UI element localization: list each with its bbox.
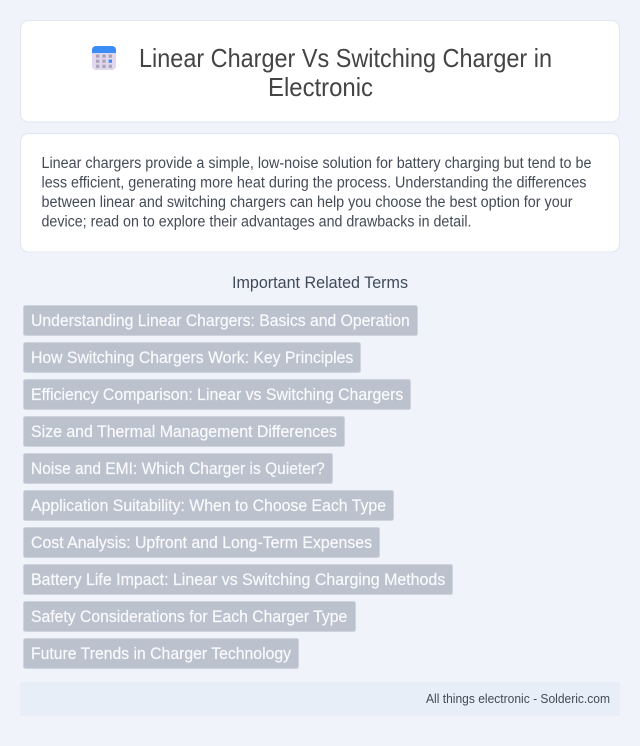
tag: application suitability (24, 490, 394, 520)
tag: application suitability: Application Suitability: When to Choose Each Type (31, 497, 386, 515)
panel: intro paragraph: between linear and switching chargers can help you choose the best option for your (42, 194, 572, 211)
title: Linear Charger Vs Switching Charger in (139, 43, 552, 73)
title (139, 43, 552, 102)
panel: intro paragraph: Linear chargers provide a simple, low-noise solution for battery charging but tend to be (42, 155, 592, 172)
tag: size and thermal management: Size and Thermal Management Differences (31, 423, 337, 441)
tag: noise and EMI (24, 454, 332, 484)
tag: future trends (24, 638, 298, 668)
tag: battery life impact: Battery Life Impact: Linear vs Switching Charging Methods (31, 571, 445, 589)
panel: intro paragraph (20, 134, 620, 252)
tag: cost analysis (24, 528, 380, 558)
footer bar: All things electronic - Solderic.com (426, 692, 610, 706)
tag: efficiency comparison (24, 380, 410, 410)
panel: intro paragraph: device; read on to explore their advantages and drawbacks in detail. (42, 214, 472, 230)
panel: title card (20, 20, 620, 122)
tag: safety considerations (24, 602, 356, 632)
footer bar (20, 682, 620, 716)
tag: cost analysis: Cost Analysis: Upfront and Long-Term Expenses (31, 534, 372, 552)
tag: noise and EMI: Noise and EMI: Which Charger is Quieter? (31, 460, 325, 478)
tag: efficiency comparison: Efficiency Comparison: Linear vs Switching Chargers (31, 386, 403, 404)
tag: how switching chargers work: How Switching Chargers Work: Key Principles (31, 349, 353, 367)
tag: how switching chargers work (24, 342, 360, 372)
icon: calendar grid (92, 46, 116, 70)
tag: safety considerations: Safety Considerations for Each Charger Type (31, 608, 347, 626)
panel: intro paragraph: less efficient, generating more heat during the process. Understanding the differences (42, 174, 587, 192)
tag: battery life impact (24, 564, 452, 594)
heading: important related terms: Important Related Terms (232, 273, 408, 292)
tag: future trends: Future Trends in Charger Technology (31, 645, 292, 663)
title: Electronic (268, 72, 373, 102)
tag: understanding linear chargers (24, 306, 418, 336)
tag: size and thermal management (24, 416, 344, 446)
tag: understanding linear chargers: Understanding Linear Chargers: Basics and Operation (31, 312, 410, 330)
